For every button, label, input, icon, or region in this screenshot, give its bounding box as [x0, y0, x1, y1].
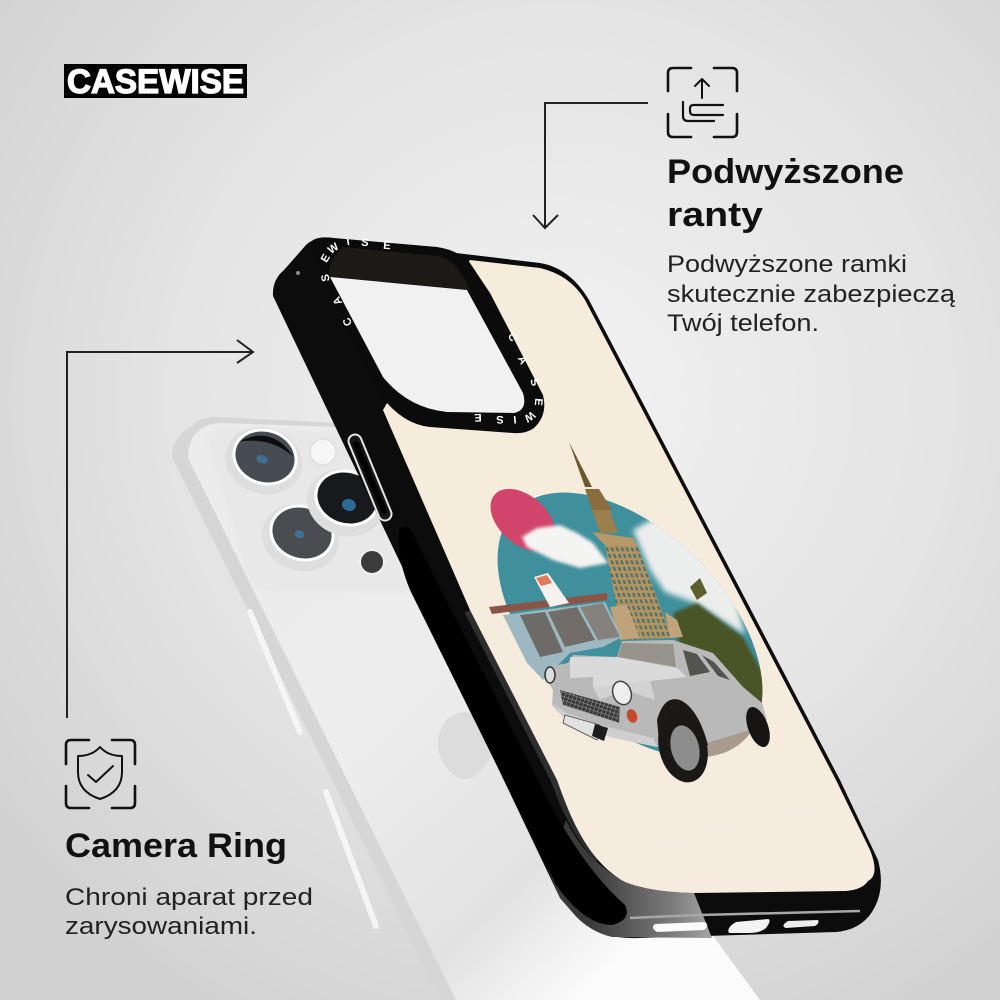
artwork: car	[545, 640, 775, 788]
ring engraved lettering: S	[361, 237, 369, 249]
artwork: ground	[707, 730, 750, 757]
text: raised edges description: Twój telefon.	[667, 310, 819, 337]
text: camera ring description: Chroni aparat przed	[65, 884, 313, 911]
ring inner top wall	[329, 247, 470, 290]
port: speaker right	[783, 920, 819, 928]
camera ring	[310, 236, 544, 433]
car wheel arch	[657, 699, 708, 752]
tower right wing	[665, 612, 683, 638]
tower spire	[569, 442, 592, 487]
artwork: treetop	[690, 578, 707, 600]
car bumper	[552, 703, 657, 747]
text: raised edges description	[667, 251, 955, 337]
volume button	[355, 441, 385, 514]
heading: Camera Ring: Camera Ring	[65, 827, 287, 865]
artwork: kiosk	[489, 573, 622, 680]
car turn signal	[625, 708, 639, 724]
icon: raised edges	[668, 68, 737, 137]
ring engraved lettering: S	[496, 413, 504, 425]
ring outer frame	[310, 237, 544, 433]
car headlight left	[545, 667, 555, 683]
ring engraved lettering: E	[474, 411, 482, 423]
case side strip next to back panel	[470, 610, 600, 858]
ring engraved lettering: E	[319, 252, 333, 265]
lens: top left	[216, 417, 311, 504]
arrow: raised edges	[533, 103, 648, 228]
white phone seen from the back	[172, 417, 760, 1000]
car side windows	[683, 650, 730, 680]
black phone case	[273, 238, 881, 938]
artwork: clouds	[522, 525, 608, 568]
heading: Podwyższone ranty: Podwyższone	[667, 153, 904, 191]
car windshield	[618, 643, 676, 667]
text: camera ring description: zarysowaniami.	[65, 913, 257, 940]
ring engraved lettering	[319, 236, 544, 425]
phone side bevel	[172, 417, 760, 1000]
ring engraved lettering: W	[521, 408, 537, 424]
tower main body	[605, 545, 672, 640]
tower left wing	[610, 605, 640, 640]
car grille	[560, 690, 620, 723]
port: usb	[728, 919, 770, 933]
case gloss	[296, 271, 300, 275]
car licence plate	[563, 715, 600, 740]
text: raised edges description: skutecznie zabezpieczą	[667, 281, 955, 308]
ring engraved lettering: S	[527, 377, 541, 388]
car headlight right	[609, 679, 635, 707]
artwork: tree	[673, 603, 765, 710]
car front fascia	[593, 680, 655, 700]
ring opening	[330, 277, 524, 413]
port: speaker left	[653, 922, 707, 932]
icon: shield	[66, 740, 135, 808]
side button: upper	[250, 612, 300, 732]
artwork: tower	[569, 442, 683, 640]
ring engraved lettering: A	[331, 294, 345, 307]
flash	[310, 439, 336, 465]
case lower left translucent rim	[548, 820, 712, 938]
car hood	[570, 657, 687, 687]
text: raised edges description: Podwyższone ramki	[667, 251, 907, 278]
car front wheel	[651, 706, 715, 788]
text: camera ring description	[65, 884, 313, 940]
lens: bottom	[253, 494, 348, 581]
arrow: camera ring	[67, 340, 253, 718]
ring engraved lettering: I	[513, 413, 517, 425]
ring engraved lettering: E	[383, 240, 391, 252]
tower upper tier	[592, 510, 618, 533]
ring engraved lettering: C	[341, 315, 355, 328]
side button: lower	[326, 792, 376, 926]
tower ledge	[592, 532, 638, 547]
case side slot	[398, 527, 627, 925]
phone body	[188, 423, 760, 1000]
artwork: teal disc	[449, 444, 811, 806]
car bumper guard	[592, 724, 608, 741]
ring engraved lettering: A	[515, 354, 529, 367]
car front hub	[666, 722, 704, 774]
apple logo	[438, 712, 494, 779]
artwork: sky cloud right	[633, 515, 745, 635]
heading: Podwyższone ranty	[667, 153, 904, 234]
car body	[545, 640, 767, 747]
case outer body	[273, 238, 881, 938]
artwork: collage on case	[489, 442, 770, 782]
ring engraved lettering: C	[505, 331, 519, 344]
tower clock block	[585, 489, 612, 510]
heading: Podwyższone ranty: ranty	[667, 196, 763, 234]
cream back panel	[383, 260, 875, 893]
ring engraved lettering: E	[532, 398, 544, 406]
ring engraved lettering: S	[319, 273, 333, 282]
rim highlight	[630, 911, 860, 918]
ring engraved lettering: I	[346, 236, 351, 248]
artwork: red sun	[479, 477, 567, 563]
lens: right	[298, 459, 393, 546]
ring engraved lettering: W	[326, 241, 342, 257]
lidar sensor	[360, 550, 384, 574]
camera plateau	[207, 428, 410, 592]
logo: CASEWISE: CASEWISE	[67, 63, 244, 101]
car rear wheel	[741, 704, 775, 750]
